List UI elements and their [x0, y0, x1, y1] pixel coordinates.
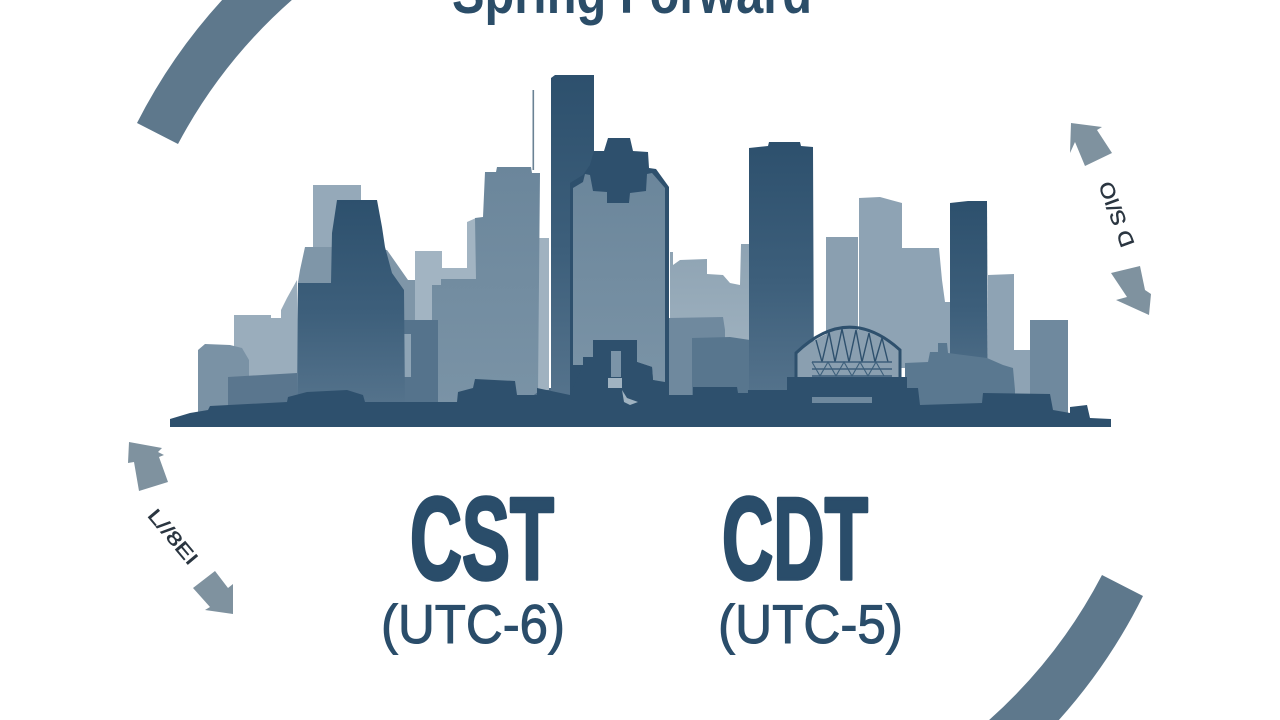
antenna: [532, 90, 534, 170]
lower block right: [905, 343, 1015, 406]
icon: downward arrow left: [193, 571, 233, 614]
CST offset: (UTC-6): [381, 593, 565, 655]
icon: upward arrow right: [1070, 123, 1112, 166]
CST heading: CST: [410, 473, 554, 604]
CDT offset: (UTC-5): [718, 593, 903, 655]
backing band filling gaps at the skyline base: [405, 388, 1030, 410]
low block left: [228, 373, 297, 406]
mid block center right: [669, 317, 725, 402]
city skyline: [170, 75, 1111, 427]
CDT heading: CDT: [722, 473, 868, 604]
dark ground silhouette: [170, 340, 1111, 427]
back layer light buildings left: [198, 185, 549, 412]
right arrow pair with label: [1070, 123, 1151, 315]
ring arc: bottom right: [988, 575, 1143, 720]
dark stepped tower left: [297, 200, 405, 405]
back layer light buildings center right: [670, 244, 749, 340]
rectangular tower: [749, 142, 814, 397]
icon: upward arrow left: [128, 442, 168, 491]
arched bridge structure: [796, 327, 900, 377]
far right building: [1030, 320, 1068, 414]
annex building with window: [404, 320, 438, 406]
low dark block center right: [692, 337, 750, 396]
left arrow pair with label: [128, 442, 233, 614]
tall central tower: [551, 75, 594, 397]
mid-tone building left of center: [432, 167, 540, 405]
right light buildings: [826, 197, 1031, 400]
ring arc: top left: [137, 0, 293, 144]
narrow tower right: [950, 201, 988, 400]
label: rotated left: L//8EI: [143, 505, 201, 569]
label: rotated right: D S/IO: [1095, 178, 1139, 250]
CST block: [381, 473, 565, 655]
crown building: [570, 138, 669, 397]
icon: downward arrow right: [1111, 266, 1151, 315]
gate details: [608, 351, 872, 405]
CDT block: [718, 473, 903, 655]
